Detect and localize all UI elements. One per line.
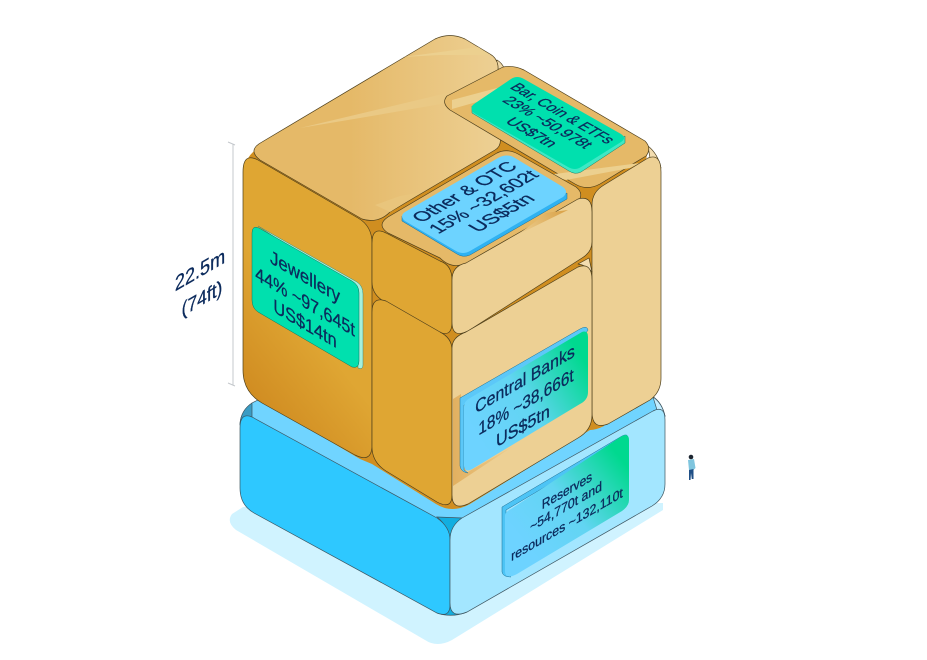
label: bar, coin and etfs: Bar, Coin & ETFs — [506, 81, 618, 146]
shadow of other and otc card — [517, 210, 568, 235]
label: central banks: Central Banks — [475, 340, 575, 418]
label: reserves and resources: resources ~132,110t — [511, 485, 623, 564]
height marker — [175, 142, 235, 386]
top face: big block — [254, 36, 500, 220]
highlights: big top — [300, 93, 447, 128]
label: central banks: 18% ~38,666t — [478, 364, 574, 440]
label: jewellery — [252, 226, 363, 369]
label: central banks — [460, 327, 588, 473]
label: other and otc: US$5tn — [464, 191, 540, 235]
gold block — [243, 36, 661, 509]
left face: central banks block — [372, 300, 452, 505]
label: other and otc — [402, 156, 567, 256]
right face: tall right block — [592, 157, 661, 426]
base right face — [450, 409, 665, 614]
label: jewellery: US$14tn — [273, 296, 337, 353]
height marker: 22.5m — [175, 244, 225, 297]
right face: other and otc block — [452, 198, 592, 334]
top face: other and otc block — [382, 151, 581, 266]
label: bar, coin and etfs: 23% ~50,978t — [498, 94, 596, 151]
left face: jewellery block — [243, 158, 372, 458]
right face: central banks block — [452, 266, 592, 506]
label: jewellery: 44% ~97,645t — [255, 263, 355, 342]
label: reserves and resources: Reserves — [542, 468, 592, 513]
shadow on central banks face — [453, 394, 515, 486]
top face: bar coin block — [445, 66, 649, 188]
label: reserves and resources: ~54,770t and — [530, 478, 602, 535]
label: bar, coin and etfs — [472, 77, 625, 173]
ground shadow — [230, 503, 663, 644]
label: bar, coin and etfs: US$7tn — [501, 115, 561, 150]
dark backing seen through the rounded corners — [244, 60, 648, 509]
label: other and otc: 15% ~32,602t — [424, 167, 545, 237]
left face: other and otc block — [372, 231, 452, 334]
base left face — [240, 416, 450, 614]
icon: person for scale — [688, 455, 696, 480]
label: other and otc: Other & OTC — [408, 159, 523, 226]
cream corner between right faces — [578, 258, 592, 272]
base: reserves block — [240, 300, 665, 615]
label: reserves and resources — [502, 435, 629, 577]
label: jewellery: Jewellery — [270, 247, 341, 309]
label: central banks: US$5tn — [496, 400, 550, 452]
height marker: (74ft) — [182, 276, 222, 322]
